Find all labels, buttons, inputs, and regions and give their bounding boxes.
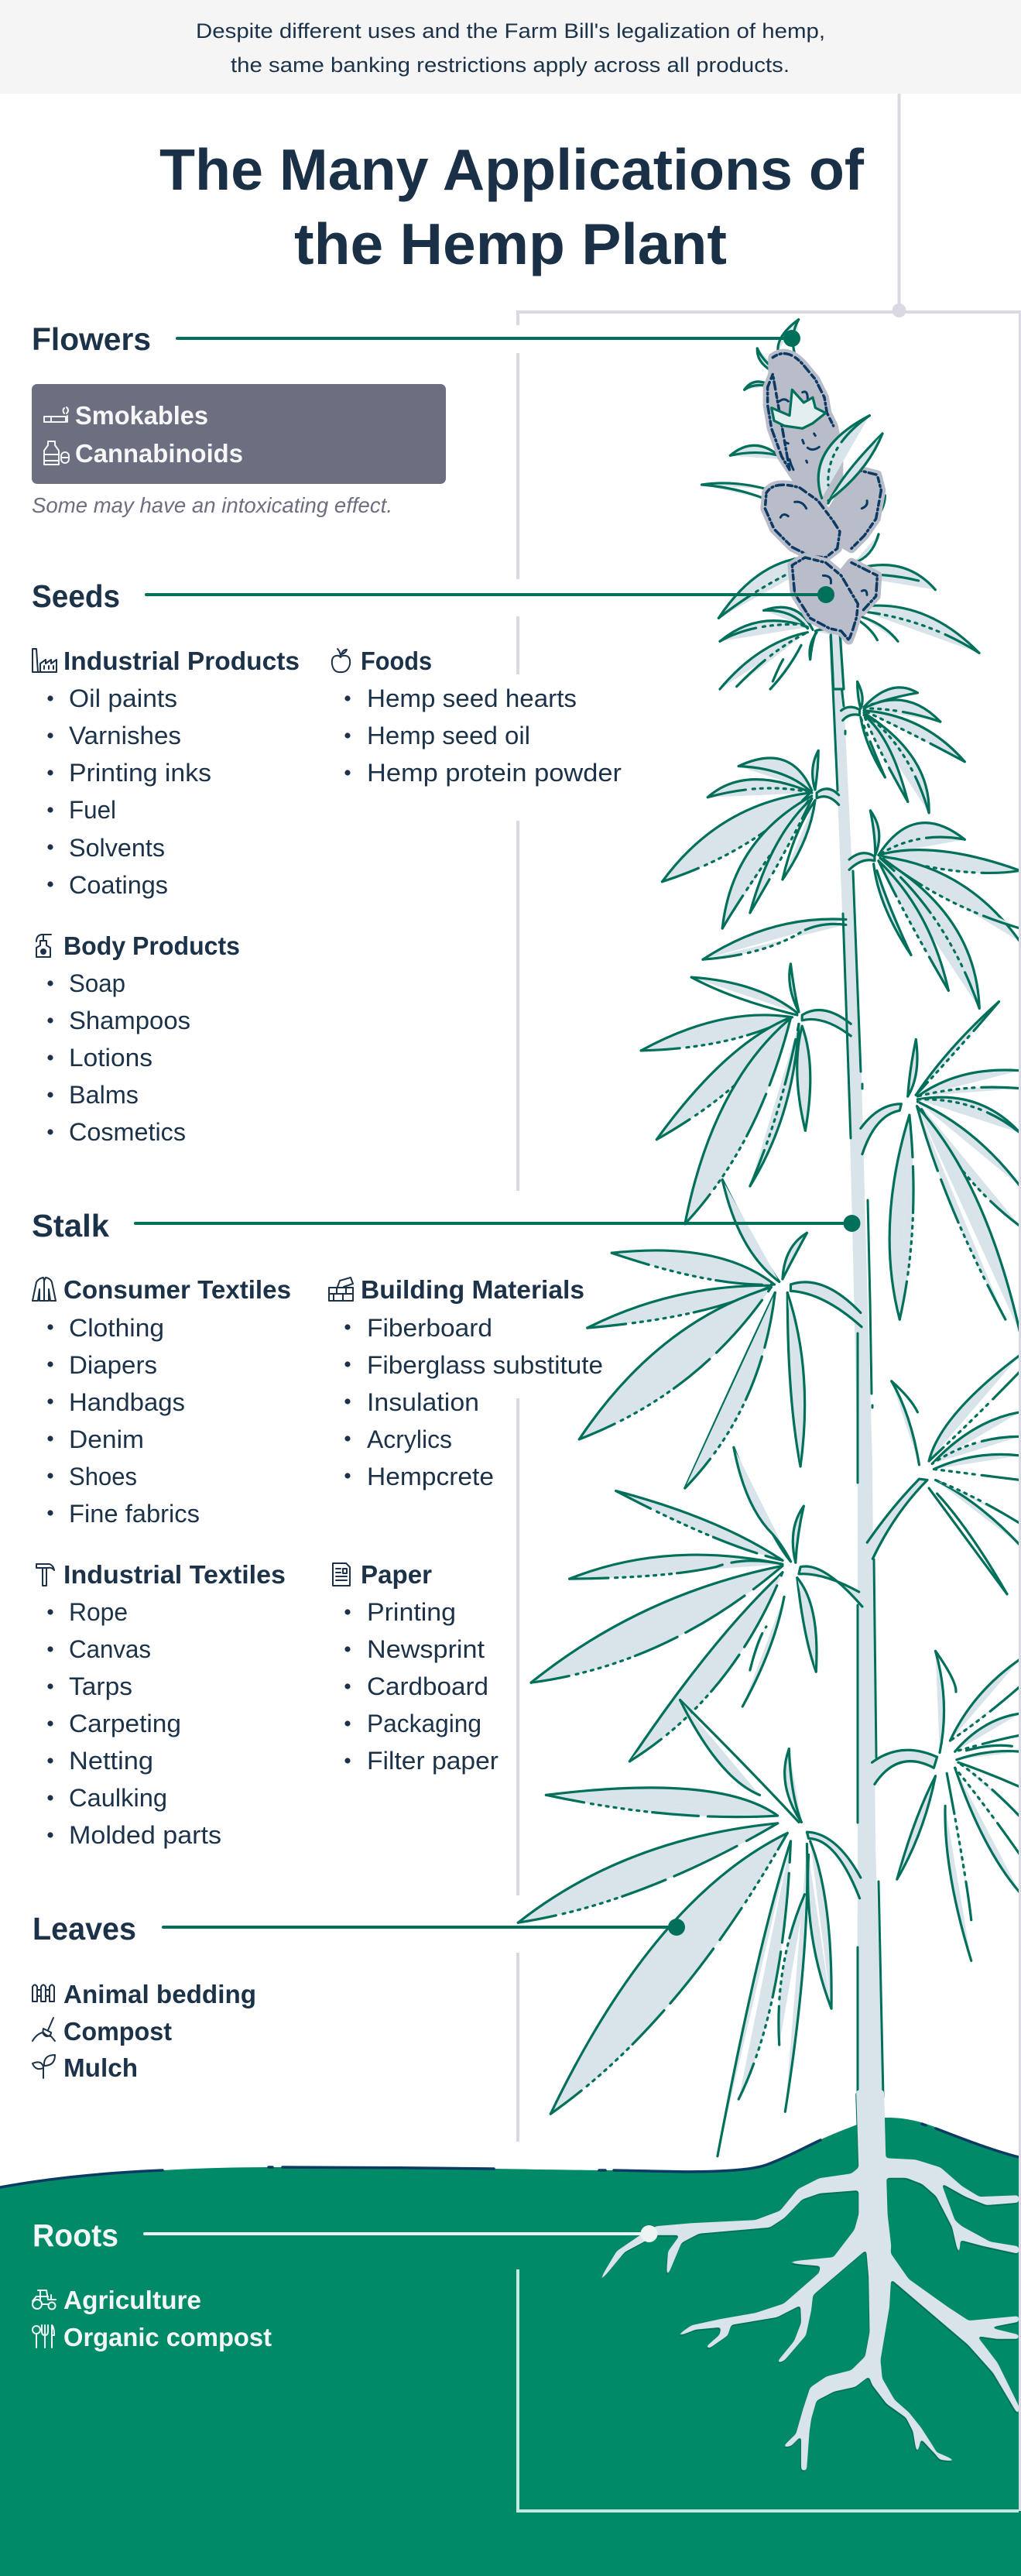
hemp plant illustration <box>518 320 1020 2470</box>
list: consumer textiles: Denim <box>69 1425 144 1453</box>
leaf L <box>518 1700 861 2156</box>
roots <box>598 2091 1019 2470</box>
panel: leaves: Mulch <box>63 2053 138 2082</box>
list: building materials: Acrylics <box>367 1425 452 1453</box>
list: foods: Foods <box>361 647 432 675</box>
ground outline dashes <box>0 2124 1019 2187</box>
icon: hammer <box>36 1564 54 1586</box>
icon: cigarette <box>44 407 68 422</box>
icon: pump bottle <box>36 935 51 957</box>
list: body products <box>36 931 240 1146</box>
list: industrial textiles: Industrial Textiles <box>63 1560 286 1589</box>
icon: tractor <box>33 2290 56 2309</box>
list: building materials: Fiberglass substitute <box>367 1351 603 1379</box>
callout: leaves <box>162 1919 685 1936</box>
icon: bottle and pill <box>44 441 69 465</box>
list: building materials: Insulation <box>367 1388 479 1416</box>
list: paper <box>333 1560 499 1775</box>
banner text: Despite different uses and the Farm Bill's legalization of hemp, <box>196 19 825 43</box>
list: paper: Paper <box>361 1560 432 1589</box>
callout: seeds <box>145 586 834 603</box>
list: industrial products: Printing inks <box>69 759 211 787</box>
list: industrial textiles: Caulking <box>69 1784 167 1812</box>
background: ground <box>0 2118 1021 2576</box>
heading: flowers: Flowers <box>32 321 151 357</box>
callout: stalk <box>134 1215 861 1232</box>
leaf H <box>579 1180 862 1488</box>
list: body products: Body Products <box>63 931 240 960</box>
list: foods <box>332 647 622 787</box>
box: flower products: Cannabinoids <box>75 439 243 468</box>
list: body products: Soap <box>69 969 125 997</box>
list: body products: Cosmetics <box>69 1118 186 1146</box>
title: The Many Applications of <box>159 137 865 202</box>
list: consumer textiles <box>33 1275 291 1528</box>
icon: sprout <box>33 2055 55 2078</box>
list: consumer textiles: Clothing <box>69 1314 164 1342</box>
list: industrial products: Oil paints <box>69 684 177 712</box>
list: foods: Hemp seed hearts <box>367 684 577 712</box>
list: paper: Printing <box>367 1598 456 1626</box>
list: industrial textiles: Rope <box>69 1598 128 1626</box>
list: consumer textiles: Consumer Textiles <box>63 1275 291 1304</box>
list: industrial products: Varnishes <box>69 722 181 749</box>
heading: stalk: Stalk <box>32 1208 109 1243</box>
panel: roots <box>33 2218 272 2351</box>
list: industrial products: Coatings <box>69 871 168 899</box>
list: consumer textiles: Fine fabrics <box>69 1500 200 1528</box>
leaf J <box>872 1651 1020 1960</box>
list: industrial products: Fuel <box>69 796 116 824</box>
icon: apple <box>332 649 350 672</box>
leaf D <box>849 811 1020 1008</box>
panel: flowers <box>32 321 446 517</box>
list: body products: Lotions <box>69 1044 152 1072</box>
list: consumer textiles: Handbags <box>69 1388 185 1416</box>
leaves upper <box>641 681 1020 1333</box>
list: body products: Shampoos <box>69 1007 190 1034</box>
list: industrial textiles: Tarps <box>69 1672 132 1700</box>
list: paper: Filter paper <box>367 1747 499 1775</box>
list: industrial products: Solvents <box>69 834 165 862</box>
list: paper: Newsprint <box>367 1635 485 1663</box>
leaf F <box>641 964 851 1224</box>
list: industrial textiles <box>36 1560 286 1849</box>
stalk fill <box>834 640 882 2091</box>
icon: shovel <box>33 2018 55 2041</box>
callout: flowers <box>176 330 800 347</box>
frame lines <box>518 94 1021 2511</box>
heading: leaves: Leaves <box>33 1911 136 1947</box>
list: building materials: Hempcrete <box>367 1463 494 1490</box>
list: foods: Hemp seed oil <box>367 722 530 749</box>
panel: roots: Agriculture <box>63 2286 201 2314</box>
list: industrial textiles: Netting <box>69 1747 153 1775</box>
list: building materials: Fiberboard <box>367 1314 492 1342</box>
list: consumer textiles: Shoes <box>69 1463 137 1490</box>
list: industrial products: Industrial Products <box>63 647 300 675</box>
list: foods: Hemp protein powder <box>367 759 622 787</box>
panel: seeds <box>32 578 622 1146</box>
title <box>159 137 865 276</box>
list: building materials: Building Materials <box>361 1275 584 1304</box>
leaves lower <box>518 1180 1020 2156</box>
icon: document <box>333 1563 350 1586</box>
icon: jacket <box>33 1278 56 1301</box>
list: industrial products <box>33 647 300 899</box>
leaf K <box>531 1447 862 1761</box>
heading: seeds: Seeds <box>32 578 120 614</box>
list: paper: Packaging <box>367 1710 481 1737</box>
box: flower products <box>32 384 446 484</box>
icon: fence <box>33 1985 54 2001</box>
panel: leaves: Animal bedding <box>63 1980 256 2008</box>
panel: leaves <box>33 1911 256 2082</box>
box: flower products: Smokables <box>75 401 208 430</box>
title: the Hemp Plant <box>294 211 727 276</box>
flower leaves behind buds <box>702 320 979 689</box>
list: paper: Cardboard <box>367 1672 488 1700</box>
leaf I <box>867 1355 1020 1594</box>
stalk outlines <box>831 636 883 2122</box>
leaf C <box>662 750 839 928</box>
list: consumer textiles: Diapers <box>69 1351 157 1379</box>
banner text <box>196 19 825 77</box>
panel: leaves: Compost <box>63 2017 172 2046</box>
heading: roots: Roots <box>33 2218 118 2253</box>
icon: factory <box>33 649 57 672</box>
flower leaves over buds <box>772 389 882 503</box>
buds <box>765 354 881 640</box>
callout lines <box>134 330 861 1936</box>
icon: cutlery <box>33 2325 54 2348</box>
icon: bricks <box>329 1278 353 1301</box>
callout: roots <box>143 2225 658 2242</box>
leaf G <box>861 1002 1020 1333</box>
list: body products: Balms <box>69 1081 139 1109</box>
leaf B <box>841 681 964 813</box>
panel: stalk <box>32 1208 603 1849</box>
list: industrial textiles: Canvas <box>69 1635 151 1663</box>
list: industrial textiles: Carpeting <box>69 1710 181 1737</box>
leaf E <box>703 919 846 959</box>
banner text: the same banking restrictions apply across all products. <box>231 53 790 77</box>
flower head <box>702 320 979 689</box>
list: industrial textiles: Molded parts <box>69 1821 221 1849</box>
list: building materials <box>329 1275 603 1490</box>
panel: roots: Organic compost <box>63 2323 272 2351</box>
note: Some may have an intoxicating effect. <box>32 493 392 517</box>
top banner <box>0 0 1021 94</box>
